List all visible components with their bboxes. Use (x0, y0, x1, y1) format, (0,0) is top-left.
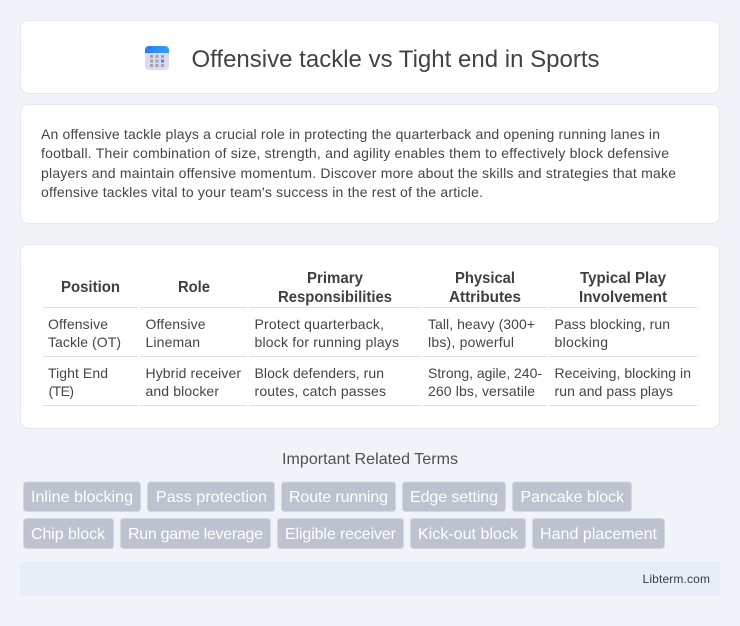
table row: tight end (48, 365, 691, 399)
intro text: players and maintain offensive momentum. Discover more about the skills and strategies that make (41, 165, 676, 181)
tag: Edge setting (410, 489, 498, 506)
table row: offensive tackle: Offensive (48, 316, 108, 332)
tag (148, 482, 274, 512)
tag: Kick-out block (418, 526, 519, 543)
table row: tight end: 260 lbs, versatile (428, 383, 535, 399)
table row: offensive tackle: block for running plays (254, 334, 399, 350)
table header: Attributes (449, 289, 521, 306)
table row: tight end: and blocker (146, 383, 219, 399)
tag (532, 518, 664, 548)
tag: Inline blocking (31, 489, 133, 506)
table header: Involvement (579, 289, 668, 306)
table row: offensive tackle: blocking (554, 334, 608, 350)
table row: offensive tackle: Pass blocking, run (554, 316, 670, 332)
panel: header (20, 20, 720, 94)
intro text: An offensive tackle plays a crucial role in protecting the quarterback and opening running lanes in (41, 126, 660, 142)
table header: Responsibilities (278, 289, 392, 306)
tag: Pancake block (520, 489, 625, 506)
intro text: football. Their combination of size, strength, and agility enables them to effectively block defensive (41, 145, 669, 161)
table row: offensive tackle: Tall, heavy (300+ (428, 316, 535, 332)
heading: related terms: Important Related Terms (282, 451, 458, 468)
tag: Route running (289, 489, 388, 506)
intro text (41, 126, 676, 200)
table header: Position (61, 279, 120, 296)
panel: comparison table (20, 244, 720, 428)
tag (24, 518, 114, 548)
table row: tight end: run and pass plays (554, 383, 673, 399)
table row: offensive tackle: Tackle (OT) (48, 334, 121, 350)
table row: offensive tackle: Lineman (146, 334, 200, 350)
table header: Physical (455, 270, 515, 287)
footer: Libterm.com (642, 572, 710, 586)
table header (61, 270, 668, 306)
table row: tight end: Receiving, blocking in (554, 365, 691, 381)
panel: intro (20, 104, 720, 224)
tag: Pass protection (156, 489, 267, 506)
tag (120, 518, 270, 548)
tag (24, 482, 140, 512)
tag: Chip block (31, 526, 106, 543)
icon: calendar (145, 46, 169, 70)
table header: Role (178, 279, 210, 296)
tag (410, 518, 526, 548)
table row: tight end: Strong, agile, 240- (428, 365, 542, 381)
table row: tight end: Tight End (48, 365, 108, 381)
tag (282, 482, 396, 512)
tags: related terms (24, 482, 664, 548)
tag: Hand placement (540, 526, 658, 543)
table row: tight end: (TE) (48, 383, 74, 399)
table row: offensive tackle: Offensive (146, 316, 206, 332)
table header: Typical Play (580, 270, 666, 287)
tag (512, 482, 632, 512)
table row: tight end: Block defenders, run (254, 365, 384, 381)
tag (278, 518, 404, 548)
footer (20, 562, 720, 596)
table row: offensive tackle: lbs), powerful (428, 334, 514, 350)
tag (402, 482, 506, 512)
table header: Primary (307, 270, 363, 287)
intro text: offensive tackles vital to your team's success in the rest of the article. (41, 184, 483, 200)
table row: tight end: Hybrid receiver (146, 365, 241, 381)
table row: offensive tackle (48, 316, 670, 350)
table row: tight end: routes, catch passes (254, 383, 386, 399)
tag: Eligible receiver (285, 526, 397, 543)
tag: Run game leverage (128, 526, 263, 543)
table row: offensive tackle: Protect quarterback, (254, 316, 384, 332)
title: Offensive tackle vs Tight end in Sports (192, 46, 600, 73)
